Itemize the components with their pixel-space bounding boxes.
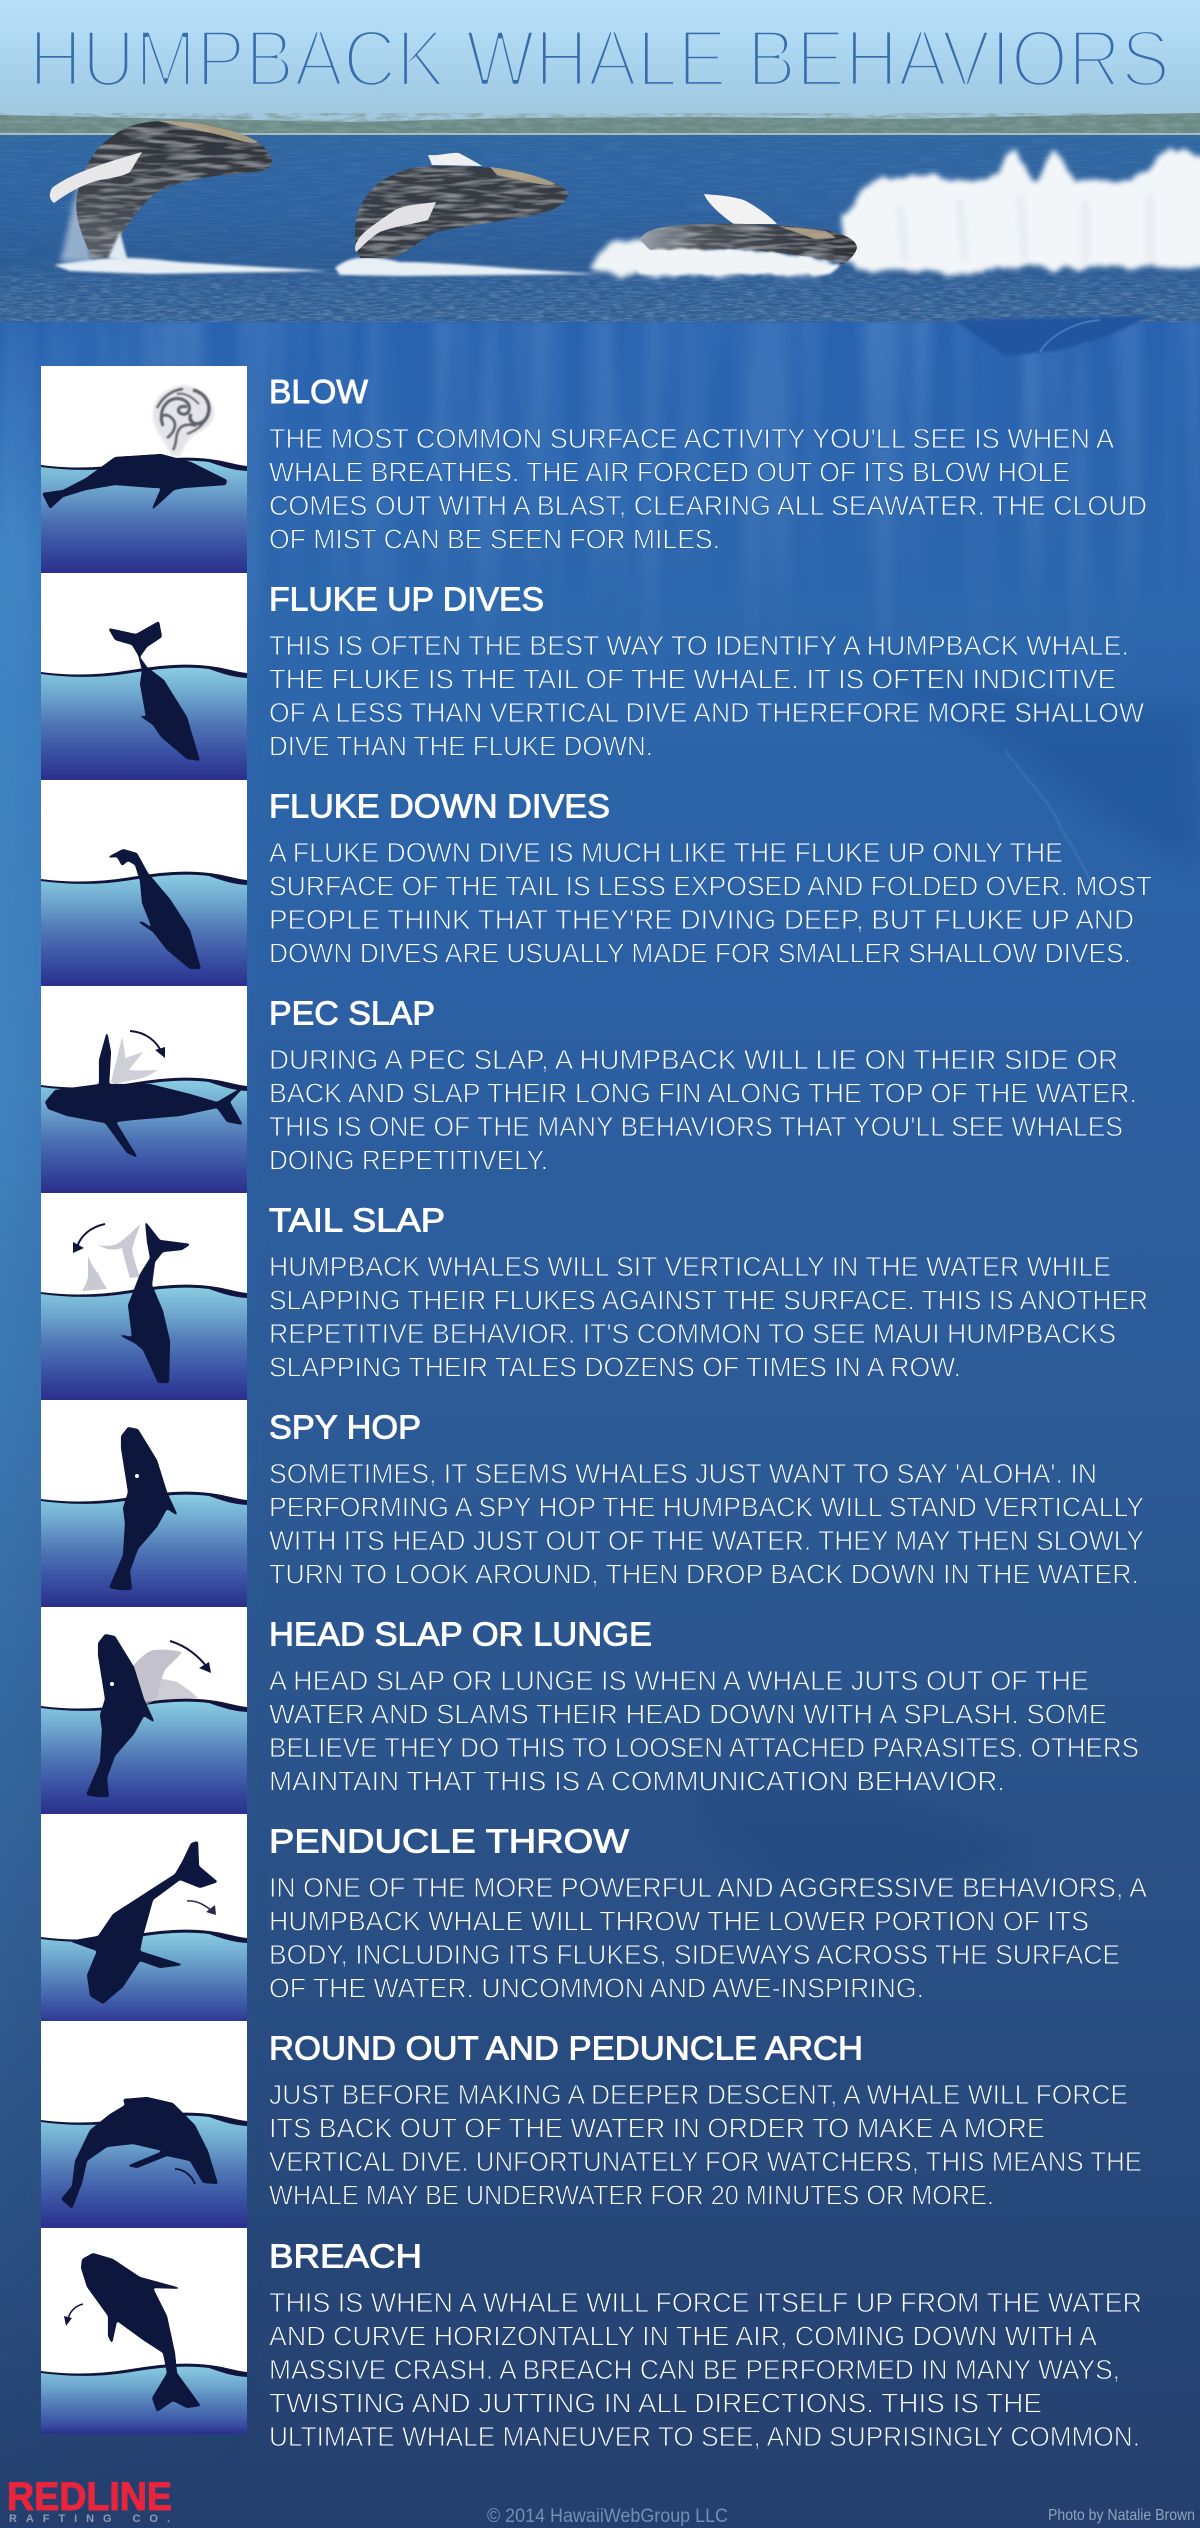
text: spy hop: TURN TO LOOK AROUND, THEN DROP BACK DOWN IN THE WATER.: [269, 1558, 1139, 1590]
icon: eye: [110, 1682, 114, 1686]
arrow: [170, 1641, 211, 1673]
text: spy hop: [269, 1458, 1144, 1590]
background ghost whale: upper: [820, 640, 1200, 900]
text: penducle throw: [269, 1872, 1147, 2004]
text: fluke down dives: DOWN DIVES ARE USUALLY MADE FOR SMALLER SHALLOW DIVES.: [269, 938, 1131, 968]
logo: redline rafting co.: REDLINE: [7, 2475, 172, 2519]
panel: tail slap illustration: [41, 1193, 247, 1400]
arrow: [187, 1901, 216, 1915]
heading: head slap or lunge: HEAD SLAP OR LUNGE: [269, 1616, 652, 1652]
whale 3: [630, 194, 857, 274]
heading: penducle throw: PENDUCLE THROW: [269, 1822, 630, 1860]
text: tail slap: [269, 1251, 1148, 1382]
panel: fluke down dive illustration: [41, 780, 247, 987]
heading: fluke down dives: FLUKE DOWN DIVES: [269, 788, 610, 824]
text: fluke down dives: PEOPLE THINK THAT THEY'RE DIVING DEEP, BUT FLUKE UP AND: [269, 904, 1134, 935]
text: tail slap: HUMPBACK WHALES WILL SIT VERTICALLY IN THE WATER WHILE: [269, 1251, 1111, 1282]
splash spray: [590, 148, 1200, 275]
text: fluke up dives: OF A LESS THAN VERTICAL DIVE AND THEREFORE MORE SHALLOW: [269, 697, 1145, 728]
arrow: [64, 2304, 83, 2326]
text: round out and peduncle arch: JUST BEFORE MAKING A DEEPER DESCENT, A WHALE WILL FORCE: [269, 2079, 1128, 2110]
whale 1: [50, 121, 330, 274]
heading: spy hop: SPY HOP: [269, 1408, 421, 1446]
panel: blow illustration: [41, 366, 247, 573]
arrow: [73, 1224, 105, 1253]
text: round out and peduncle arch: WHALE MAY BE UNDERWATER FOR 20 MINUTES OR MORE.: [269, 2180, 994, 2210]
text: spy hop: PERFORMING A SPY HOP THE HUMPBACK WILL STAND VERTICALLY: [269, 1492, 1144, 1522]
text: penducle throw: HUMPBACK WHALE WILL THROW THE LOWER PORTION OF ITS: [269, 1906, 1089, 1936]
icon: whale silhouette: [81, 2253, 201, 2412]
text: fluke up dives: THE FLUKE IS THE TAIL OF THE WHALE. IT IS OFTEN INDICITIVE: [269, 664, 1116, 694]
icon: blow mist: [153, 386, 214, 456]
background ghost whale: lower: [690, 1784, 1030, 1898]
text: pec slap: [269, 1044, 1137, 1176]
text: spy hop: WITH ITS HEAD JUST OUT OF THE WATER. THEY MAY THEN SLOWLY: [269, 1525, 1144, 1556]
icon: eye: [135, 1474, 139, 1478]
icon: whale silhouette: [117, 1221, 191, 1383]
panel: head slap illustration: [41, 1607, 247, 1814]
text: pec slap: THIS IS ONE OF THE MANY BEHAVIORS THAT YOU'LL SEE WHALES: [269, 1111, 1123, 1142]
text: pec slap: DOING REPETITIVELY.: [269, 1144, 548, 1176]
logo: redline rafting co.: RAFTING CO.: [9, 2513, 170, 2525]
text: pec slap: BACK AND SLAP THEIR LONG FIN ALONG THE TOP OF THE WATER.: [269, 1078, 1137, 1108]
icon: whale silhouette: [61, 2097, 218, 2209]
text: breach: MASSIVE CRASH. A BREACH CAN BE PERFORMED IN MANY WAYS,: [269, 2354, 1120, 2385]
text: blow: OF MIST CAN BE SEEN FOR MILES.: [269, 524, 720, 554]
text: breach: TWISTING AND JUTTING IN ALL DIRECTIONS. THIS IS THE: [269, 2388, 1042, 2418]
text: breach: AND CURVE HORIZONTALLY IN THE AIR, COMING DOWN WITH A: [269, 2320, 1097, 2352]
text: fluke up dives: [269, 630, 1145, 762]
text: penducle throw: OF THE WATER. UNCOMMON AND AWE-INSPIRING.: [269, 1972, 924, 2004]
panel: round out illustration: [41, 2021, 247, 2228]
text: round out and peduncle arch: VERTICAL DIVE. UNFORTUNATELY FOR WATCHERS, THIS MEANS THE: [269, 2146, 1142, 2177]
text: penducle throw: IN ONE OF THE MORE POWERFUL AND AGGRESSIVE BEHAVIORS, A: [269, 1872, 1147, 1903]
text: round out and peduncle arch: [269, 2079, 1142, 2210]
icon: whale silhouette: [45, 1031, 246, 1158]
arrow: [175, 2169, 195, 2184]
text: fluke up dives: THIS IS OFTEN THE BEST WAY TO IDENTIFY A HUMPBACK WHALE.: [269, 630, 1129, 661]
sea: [0, 133, 1200, 322]
panel: peduncle throw illustration: [41, 1814, 247, 2021]
text: head slap or lunge: WATER AND SLAMS THEIR HEAD DOWN WITH A SPLASH. SOME: [269, 1698, 1107, 1730]
heading: pec slap: PEC SLAP: [269, 994, 435, 1032]
icon: ghost tail motion: [82, 1224, 140, 1291]
icon: whale silhouette: [69, 1841, 218, 2004]
text: tail slap: SLAPPING THEIR FLUKES AGAINST THE SURFACE. THIS IS ANOTHER: [269, 1284, 1148, 1316]
sky: [0, 0, 1200, 125]
arrow: [130, 1031, 165, 1058]
text: breach: THIS IS WHEN A WHALE WILL FORCE ITSELF UP FROM THE WATER: [269, 2287, 1142, 2318]
text: breach: ULTIMATE WHALE MANEUVER TO SEE, AND SUPRISINGLY COMMON.: [269, 2421, 1140, 2452]
heading: breach: BREACH: [269, 2238, 422, 2274]
icon: whale silhouette: [42, 454, 227, 511]
icon: whale silhouette: [106, 849, 201, 969]
text: head slap or lunge: MAINTAIN THAT THIS IS A COMMUNICATION BEHAVIOR.: [269, 1766, 1005, 1796]
heading: fluke up dives: FLUKE UP DIVES: [269, 580, 544, 618]
text: penducle throw: BODY, INCLUDING ITS FLUKES, SIDEWAYS ACROSS THE SURFACE: [269, 1939, 1120, 1970]
panel: spy hop illustration: [41, 1400, 247, 1607]
heading: blow: BLOW: [269, 373, 369, 410]
text: head slap or lunge: A HEAD SLAP OR LUNGE IS WHEN A WHALE JUTS OUT OF THE: [269, 1665, 1089, 1696]
underwater whale shadow: [955, 316, 1150, 356]
text: fluke down dives: A FLUKE DOWN DIVE IS MUCH LIKE THE FLUKE UP ONLY THE: [269, 837, 1063, 868]
panel: pec slap illustration: [41, 986, 247, 1193]
splash shading: [900, 195, 1150, 262]
text: round out and peduncle arch: ITS BACK OUT OF THE WATER IN ORDER TO MAKE A MORE: [269, 2112, 1045, 2144]
text: head slap or lunge: BELIEVE THEY DO THIS TO LOOSEN ATTACHED PARASITES. OTHERS: [269, 1732, 1139, 1763]
text: head slap or lunge: [269, 1665, 1139, 1796]
text: blow: COMES OUT WITH A BLAST, CLEARING ALL SEAWATER. THE CLOUD: [269, 490, 1147, 521]
text: blow: WHALE BREATHES. THE AIR FORCED OUT OF ITS BLOW HOLE: [269, 456, 1070, 488]
text: fluke down dives: [269, 837, 1152, 968]
whale 2: [335, 153, 600, 276]
text: tail slap: REPETITIVE BEHAVIOR. IT'S COMMON TO SEE MAUI HUMPBACKS: [269, 1318, 1116, 1349]
icon: whale silhouette: [86, 1634, 155, 1797]
heading: tail slap: TAIL SLAP: [269, 1202, 445, 1238]
text: pec slap: DURING A PEC SLAP, A HUMPBACK WILL LIE ON THEIR SIDE OR: [269, 1044, 1118, 1075]
icon: whale silhouette: [108, 621, 200, 761]
text: breach: [269, 2287, 1142, 2452]
icon: whale silhouette: [109, 1427, 178, 1590]
header photo: [0, 0, 1200, 356]
distant land: [0, 113, 1200, 136]
text: blow: [269, 423, 1147, 554]
panel: breach illustration: [41, 2228, 247, 2434]
text: fluke up dives: DIVE THAN THE FLUKE DOWN.: [269, 730, 653, 762]
text: blow: THE MOST COMMON SURFACE ACTIVITY YOU'LL SEE IS WHEN A: [269, 423, 1114, 454]
heading: round out and peduncle arch: ROUND OUT AND PEDUNCLE ARCH: [269, 2030, 863, 2066]
text: tail slap: SLAPPING THEIR TALES DOZENS OF TIMES IN A ROW.: [269, 1352, 961, 1382]
foam in front of whale 3: [630, 249, 838, 274]
copyright: © 2014 HawaiiWebGroup LLC: [487, 2506, 728, 2527]
text: spy hop: SOMETIMES, IT SEEMS WHALES JUST WANT TO SAY 'ALOHA'. IN: [269, 1458, 1097, 1489]
text: fluke down dives: SURFACE OF THE TAIL IS LESS EXPOSED AND FOLDED OVER. MOST: [269, 870, 1152, 902]
icon: ghost fin motion: [111, 1037, 158, 1084]
icon: ghost head motion: [133, 1650, 198, 1706]
panel: fluke up dive illustration: [41, 573, 247, 780]
